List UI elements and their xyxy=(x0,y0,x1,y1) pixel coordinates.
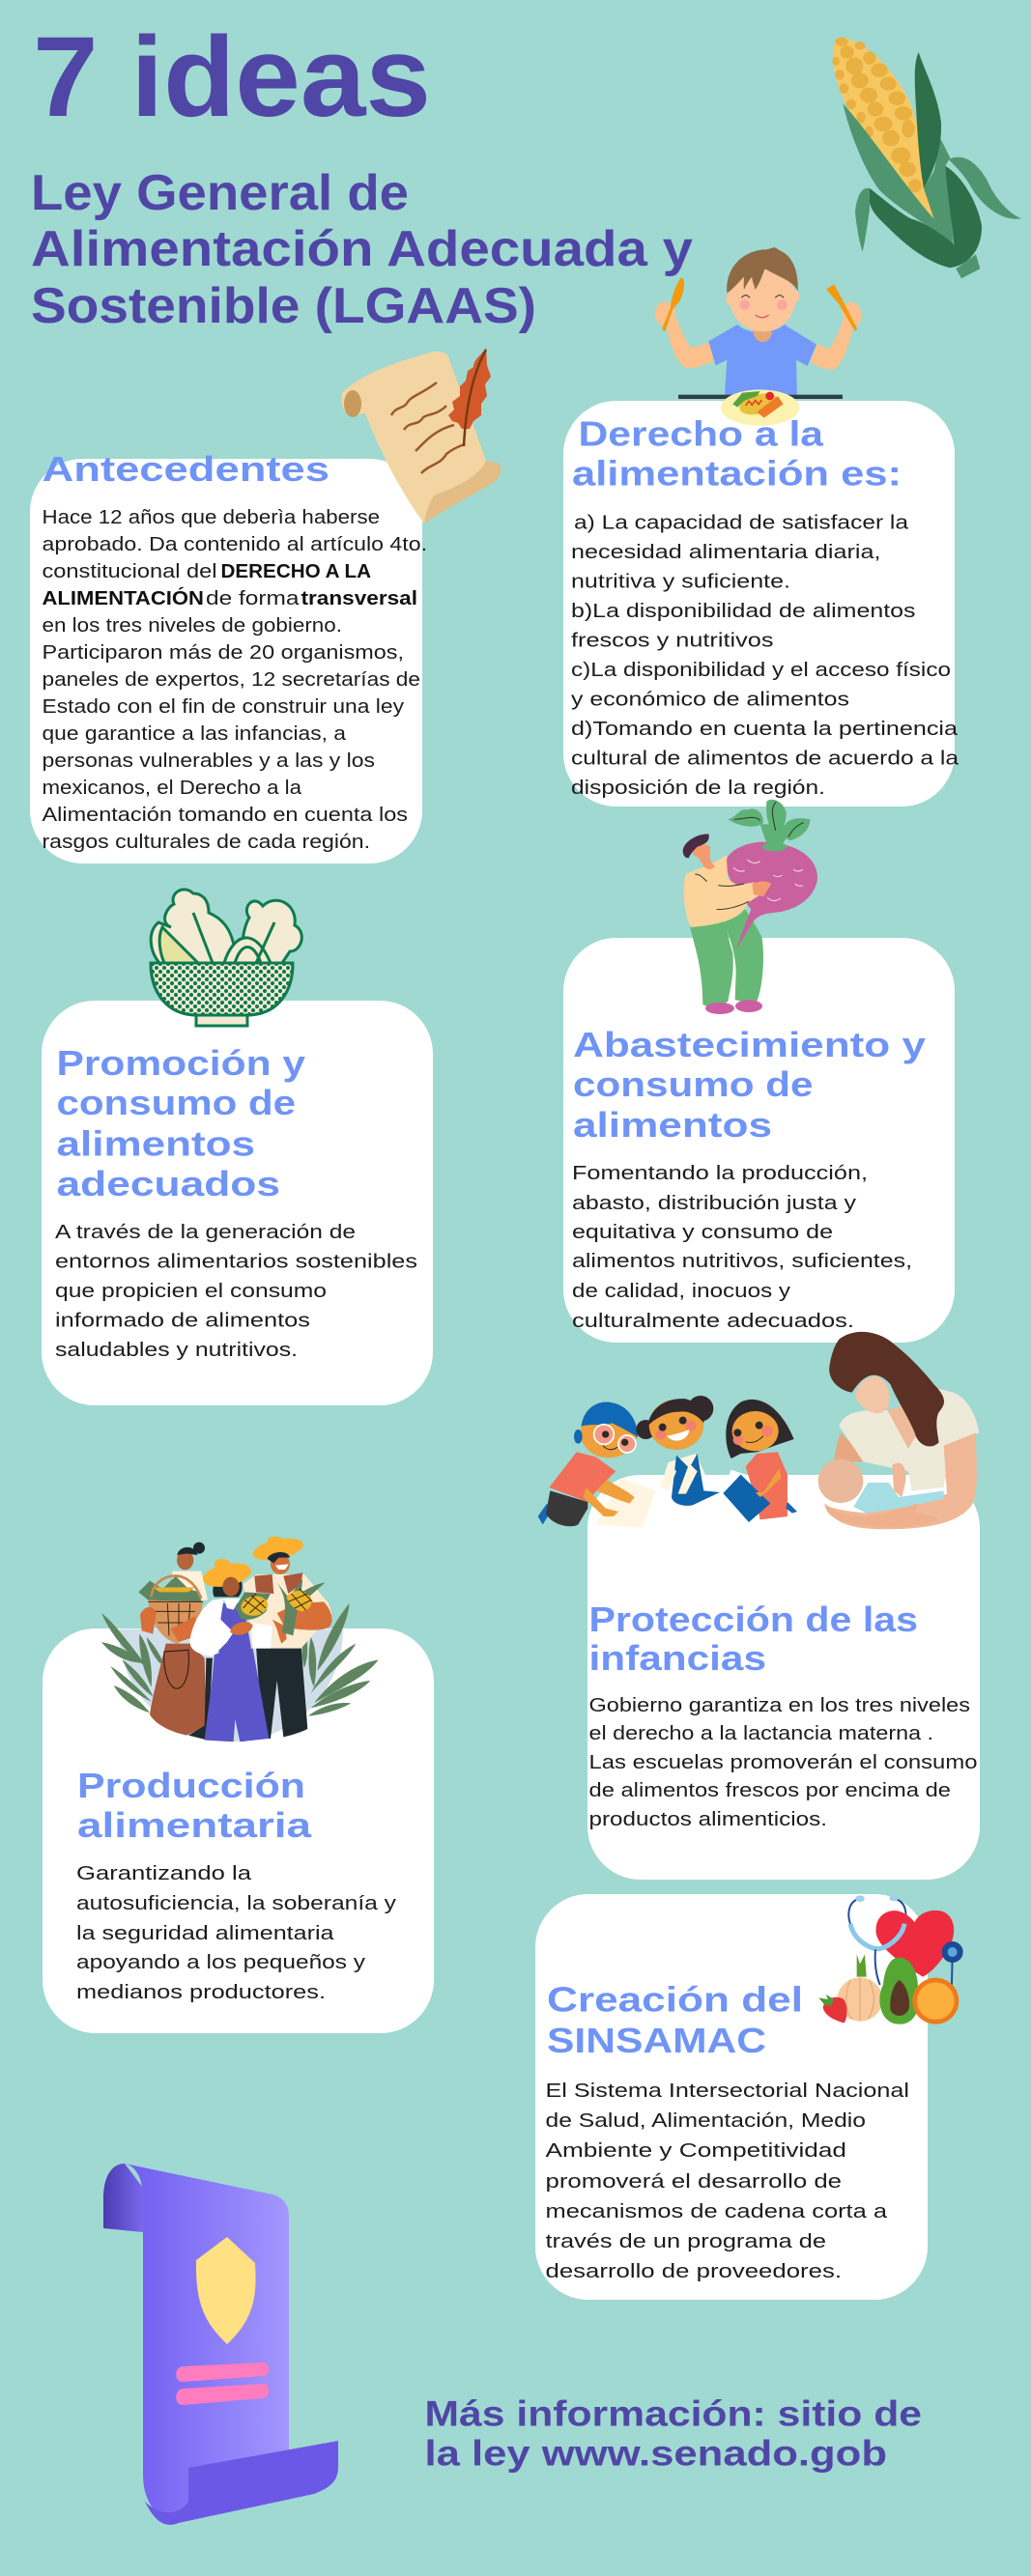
text block: Creación body: de Salud, Alimentación, Medio xyxy=(545,2110,866,2132)
text block: Antecedentes body: aprobado. Da contenido al artículo 4to. xyxy=(43,534,427,555)
icon: boy eating xyxy=(655,247,865,426)
heading: Creación: Creación del xyxy=(547,1980,803,2019)
text block: Antecedentes body: transversal xyxy=(301,588,417,609)
heading: Creación: SINSAMAC xyxy=(547,2021,766,2060)
heading: Promoción xyxy=(56,1043,305,1203)
text block: Producción body xyxy=(76,1863,396,2003)
text block: Creación body: través de un programa de xyxy=(545,2231,826,2252)
text block: Promoción body: que propicien el consumo xyxy=(55,1281,327,1302)
title: 7 ideas xyxy=(33,14,431,141)
bars xyxy=(176,2363,269,2405)
heading: Promoción: alimentos xyxy=(56,1124,255,1163)
heading: Promoción: consumo de xyxy=(56,1083,296,1122)
text block: Abastecimiento body: Fomentando la producción, xyxy=(572,1163,868,1184)
text block: Derecho body: necesidad alimentaria diaria, xyxy=(571,542,881,563)
text block: Abastecimiento body: equitativa y consumo de xyxy=(572,1222,833,1243)
text block: Creación body: El Sistema Intersectorial Nacional xyxy=(545,2081,909,2102)
text block: Producción body: la seguridad alimentaria xyxy=(76,1923,335,1944)
text block: Producción body: autosuficiencia, la soberanía y xyxy=(76,1893,396,1914)
text block: Antecedentes body: Hace 12 años que deberìa haberse xyxy=(43,507,380,528)
footer: more information: la ley www.senado.gob xyxy=(425,2434,887,2473)
icon: parchment and feather xyxy=(342,348,501,524)
footer: more information xyxy=(425,2393,922,2473)
panel: Creación del SINSAMAC xyxy=(535,1894,928,2300)
panel: Producción alimentaria xyxy=(43,1628,434,2033)
text block: Derecho body: a) La capacidad de satisfacer la xyxy=(574,512,909,533)
heading: Protección: infancias xyxy=(589,1638,766,1678)
heading: Protección xyxy=(589,1599,918,1678)
text block: Derecho body: d)Tomando en cuenta la pertinencia xyxy=(571,719,959,740)
heading: Promoción: adecuados xyxy=(56,1164,280,1203)
text block: Protección body xyxy=(589,1695,978,1830)
text block: Abastecimiento body xyxy=(572,1163,912,1332)
text block: Producción body: Garantizando la xyxy=(76,1863,252,1884)
text block: Antecedentes body: constitucional del xyxy=(43,561,216,582)
text block: Abastecimiento body: culturalmente adecuados. xyxy=(572,1311,854,1332)
text block: Creación body: desarrollo de proveedores. xyxy=(545,2261,842,2282)
text block: Producción body: medianos productores. xyxy=(76,1982,326,2003)
text block: Antecedentes body: DERECHO A LA xyxy=(220,561,371,582)
text block: Derecho body xyxy=(571,512,959,799)
text block: Antecedentes body: que garantice a las infancias, a xyxy=(43,723,347,745)
subtitle: Ley General de xyxy=(31,165,409,221)
text block: Derecho body: frescos y nutritivos xyxy=(571,630,773,651)
icon: purple scroll with shield xyxy=(103,2164,338,2525)
text block: Antecedentes body: personas vulnerables y a las y los xyxy=(43,750,375,772)
text block: Derecho body: y económico de alimentos xyxy=(571,690,849,711)
text block: Protección body: Las escuelas promoverán el consumo xyxy=(589,1752,978,1773)
text block: Creación body: Ambiente y Competitividad xyxy=(545,2140,846,2162)
text block: Abastecimiento body: de calidad, inocuos y xyxy=(572,1281,790,1302)
heading: Producción xyxy=(77,1766,312,1845)
subtitle: Alimentación Adecuada y xyxy=(31,221,693,277)
footer: more information: Más información: sitio de xyxy=(425,2393,922,2434)
icon: shield xyxy=(196,2237,256,2344)
subtitle xyxy=(31,165,693,334)
panel: Protección de las infancias xyxy=(587,1475,980,1880)
heading: Abastecimiento xyxy=(573,1025,926,1145)
text block: Antecedentes body: Alimentación tomando en cuenta los xyxy=(43,805,408,826)
text block: Abastecimiento body: abasto, distribución justa y xyxy=(572,1193,856,1214)
heading: Abastecimiento: alimentos xyxy=(573,1105,772,1145)
text block: Antecedentes body xyxy=(43,507,427,853)
text block: Antecedentes body: paneles de expertos, 12 secretarías de xyxy=(43,669,420,691)
text block: Derecho body: disposición de la región. xyxy=(571,778,825,799)
text block: Protección body: el derecho a la lactancia materna . xyxy=(589,1723,933,1744)
text block: Derecho body: b)La disponibilidad de alimentos xyxy=(571,601,916,622)
heading: Producción: alimentaria xyxy=(77,1805,312,1845)
text block: Abastecimiento body: alimentos nutritivos, suficientes, xyxy=(572,1251,912,1272)
icon: heart, stethoscope and food xyxy=(818,1895,963,2024)
heading: Derecho a la alimentación es: Derecho a la xyxy=(578,414,824,454)
text block: Promoción body: informado de alimentos xyxy=(55,1310,310,1331)
text block: Antecedentes body: rasgos culturales de cada región. xyxy=(43,832,370,853)
text block: Promoción body: saludables y nutritivos. xyxy=(55,1340,298,1361)
icon: mother nursing xyxy=(818,1332,979,1529)
text block: Antecedentes body: Estado con el fin de construir una ley xyxy=(43,696,404,718)
heading: Protección: Protección de las xyxy=(589,1599,918,1639)
text block: Producción body: apoyando a los pequeños y xyxy=(76,1952,365,1973)
icon: salad bowl xyxy=(151,890,301,1026)
text block: Promoción body xyxy=(55,1222,417,1361)
text block: Derecho body: nutritiva y suficiente. xyxy=(571,572,790,593)
heading: Derecho a la alimentación es: alimentación es: xyxy=(572,454,902,494)
panel: Antecedentes xyxy=(30,449,427,863)
text block: Promoción body: A través de la generación de xyxy=(55,1222,356,1243)
text block: Antecedentes body: ALIMENTACIÓN xyxy=(43,586,204,609)
icon: man holding beet xyxy=(683,800,817,1014)
text block: Creación body: mecanismos de cadena corta a xyxy=(545,2201,888,2222)
text block: Creación body xyxy=(545,2081,909,2282)
icon: children reading xyxy=(538,1396,797,1528)
panel: Promoción y consumo xyxy=(42,1001,433,1405)
heading: Abastecimiento: Abastecimiento y xyxy=(573,1025,926,1064)
heading: Antecedentes: Antecedentes xyxy=(43,449,329,489)
text block: Antecedentes body: mexicanos, el Derecho a la xyxy=(43,778,302,799)
heading: Derecho a la alimentación es xyxy=(572,414,902,494)
text block: Creación body: promoverá el desarrollo de xyxy=(545,2171,842,2193)
text block: Protección body: de alimentos frescos por encima de xyxy=(589,1780,951,1801)
text block: Antecedentes body: de forma xyxy=(206,588,301,609)
text block: Antecedentes body: Participaron más de 20 organismos, xyxy=(43,642,404,664)
text block: Antecedentes body: en los tres niveles de gobierno. xyxy=(43,615,342,637)
icon: farmers xyxy=(101,1517,379,1741)
heading: Creación xyxy=(547,1980,803,2060)
text block: Derecho body: c)La disponibilidad y el acceso físico xyxy=(571,660,951,681)
heading: Producción: Producción xyxy=(77,1766,305,1805)
text block: Promoción body: entornos alimentarios sostenibles xyxy=(55,1252,417,1273)
text block: Protección body: productos alimenticios. xyxy=(589,1809,827,1830)
text block: Derecho body: cultural de alimentos de acuerdo a la xyxy=(571,748,959,769)
heading: Abastecimiento: consumo de xyxy=(573,1064,814,1104)
icon: corn xyxy=(832,37,1021,278)
heading: Promoción: Promoción y xyxy=(56,1043,305,1083)
panel: Abastecimiento y consumo xyxy=(563,938,955,1343)
text block: Protección body: Gobierno garantiza en los tres niveles xyxy=(589,1695,970,1716)
panel: Derecho a la alimentación xyxy=(563,401,955,807)
subtitle: Sostenible (LGAAS) xyxy=(31,278,536,334)
